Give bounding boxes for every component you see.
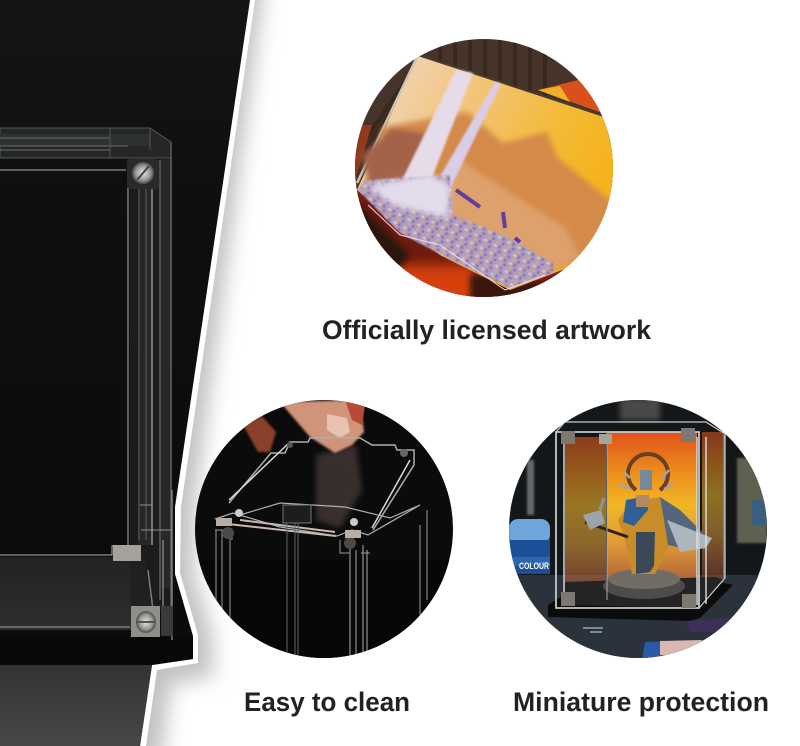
case corner brackets [561,428,696,608]
feature: officially licensed artwork [322,35,652,345]
soft shadow beside the diagonal edge [0,0,268,746]
acrylic case [556,422,725,608]
black plinth [0,637,193,665]
paint pot [509,519,550,574]
case pillars [216,530,230,620]
game piece tokens [686,618,730,632]
acrylic case edges [0,128,172,640]
miniature figure [583,454,712,599]
scenery below the artwork [356,186,608,297]
thumb and finger skin [280,400,364,453]
lower metal bracket with screw [131,606,173,637]
grey inner floor plate [0,557,155,630]
artwork sheet [357,55,625,290]
lid reflection of fingers [316,445,362,528]
image: hand lifting the acrylic lid [190,395,460,665]
top metal bracket with screw [127,159,159,189]
paint pot: COLOUR [519,561,549,571]
purple army band [358,174,553,290]
image: painted artwork panel [355,39,613,297]
feature: easy to clean [190,395,460,717]
feature: miniature protection [505,395,770,717]
lid and case screws [216,442,408,549]
panel: dark product photo on the left [0,0,255,746]
image: miniature inside a display case [505,395,770,665]
label: easy to clean: Easy to clean [244,687,410,717]
rear and side artwork [565,437,606,582]
white outline of the photo [0,0,255,746]
mountains [362,112,612,285]
dark backdrop [0,0,250,746]
label: officially licensed artwork: Officially licensed artwork [322,315,652,345]
label: miniature protection: Miniature protection [513,687,769,717]
floor beneath the base [0,665,152,746]
light beams [402,70,501,195]
acrylic lid [215,437,427,658]
floor metal bracket [113,545,141,561]
black base [548,582,733,621]
